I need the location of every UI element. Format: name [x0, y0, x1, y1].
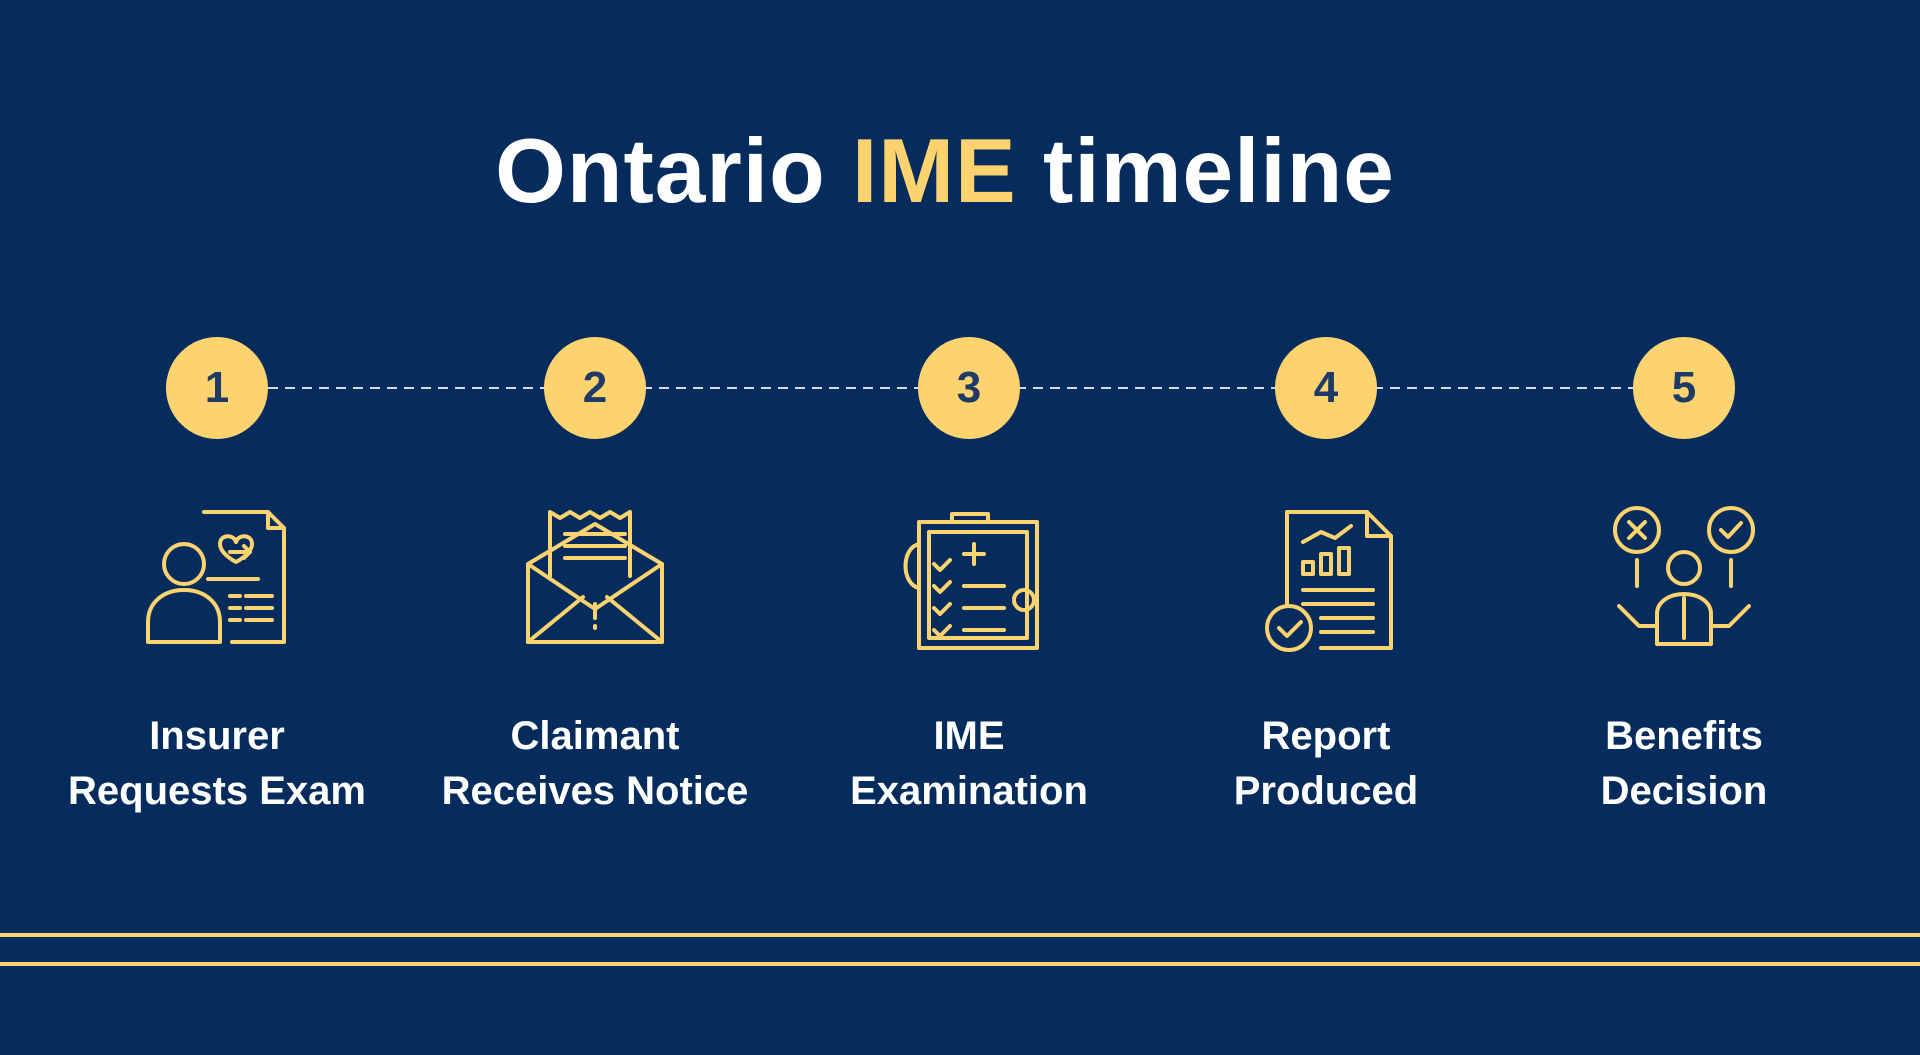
label: Report [1262, 714, 1390, 758]
dashed connector [268, 387, 1634, 389]
number badge 2 [544, 337, 646, 439]
label: IME [933, 714, 1005, 758]
number badge 4 [1275, 337, 1377, 439]
label: Benefits [1605, 714, 1763, 758]
label [442, 714, 748, 813]
label: Examination [850, 769, 1088, 813]
label [850, 714, 1088, 813]
icon: medical clipboard [904, 512, 1039, 650]
number badge 5 [1633, 337, 1735, 439]
label: Produced [1234, 769, 1418, 813]
number badge 1 [166, 337, 268, 439]
label [1601, 714, 1767, 813]
step 2 [442, 337, 748, 813]
bottom rule top [0, 933, 1920, 937]
step 4 [1234, 337, 1418, 813]
number badge 3: 3 [957, 363, 981, 412]
step 3 [850, 337, 1088, 813]
number badge 2: 2 [583, 363, 607, 412]
number badge 4: 4 [1314, 363, 1338, 412]
icon: decision person [1613, 506, 1755, 646]
number badge 5: 5 [1672, 363, 1696, 412]
step 1 [68, 337, 366, 813]
label: Decision [1601, 769, 1767, 813]
icon: envelope with notice [526, 510, 664, 644]
label: Receives Notice [442, 769, 748, 813]
number badge 3 [918, 337, 1020, 439]
number badge 1: 1 [205, 363, 229, 412]
bottom rule bottom [0, 962, 1920, 966]
icon: person with document [146, 510, 286, 644]
label: Insurer [149, 714, 285, 758]
step 5 [1601, 337, 1767, 813]
label: Requests Exam [68, 769, 366, 813]
label [68, 714, 366, 813]
label [1234, 714, 1418, 813]
label: Claimant [511, 714, 679, 758]
icon: report document [1265, 510, 1393, 652]
title: Ontario IME timeline [495, 121, 1395, 222]
